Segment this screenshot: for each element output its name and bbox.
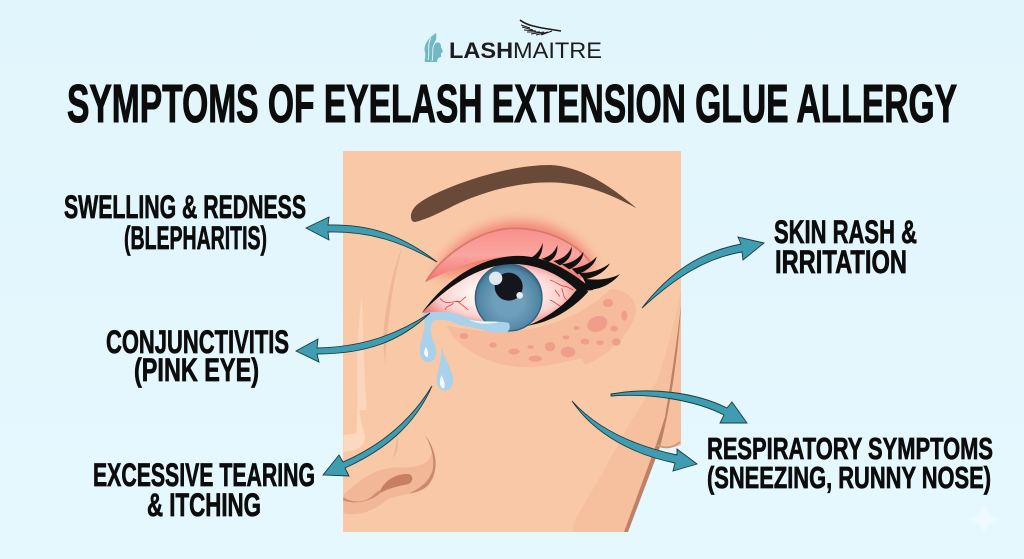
label: skin rash: IRRITATION <box>775 244 907 280</box>
arrow: respiratory upper <box>611 391 747 423</box>
eyelashes <box>532 243 620 290</box>
icon: teal face silhouette with hair <box>425 33 443 62</box>
pale highlight <box>357 297 367 410</box>
icon: faint sparkle <box>968 502 1000 536</box>
eyebrow <box>411 165 637 222</box>
pupil <box>495 273 523 301</box>
arrow: respiratory lower <box>572 401 697 471</box>
nostril wing curve <box>409 435 436 493</box>
face skin <box>343 151 681 532</box>
nose bridge highlight <box>343 380 365 452</box>
nose <box>343 380 436 514</box>
icon: lash <box>520 20 561 35</box>
tear highlights <box>424 347 428 357</box>
jaw shadow <box>573 290 681 532</box>
label: excessive tearing <box>93 457 315 523</box>
label: excessive tearing: EXCESSIVE TEARING <box>93 457 315 493</box>
lid redness glow <box>435 222 595 283</box>
label: swelling and redness <box>64 189 306 256</box>
side crease <box>393 437 398 458</box>
lid crease <box>426 228 590 282</box>
label: conjunctivitis: (PINK EYE) <box>134 352 259 388</box>
rash spots <box>460 299 627 362</box>
wrinkle <box>383 247 402 367</box>
eye highlights <box>489 272 502 285</box>
iris <box>475 264 542 331</box>
label: conjunctivitis: CONJUNCTIVITIS <box>106 324 289 360</box>
label: conjunctivitis <box>106 324 289 388</box>
label: excessive tearing: & ITCHING <box>147 487 261 523</box>
jaw line <box>624 305 681 532</box>
arrow: excessive tearing <box>323 386 432 476</box>
arrow: skin rash <box>642 237 764 308</box>
logo wordmark: LASHMAITRE <box>449 38 602 63</box>
label: skin rash <box>774 214 917 280</box>
tears <box>420 312 510 391</box>
under-eye rash patch <box>447 289 636 367</box>
swollen lid <box>426 228 590 282</box>
ear lobe line <box>657 442 680 447</box>
label: swelling and redness: (BLEPHARITIS) <box>124 220 267 256</box>
eye white <box>423 262 578 325</box>
arrow: swelling and redness <box>306 217 437 262</box>
lower lid liner <box>527 287 588 326</box>
nose shadow <box>343 453 435 514</box>
logo: Lashmaitre <box>425 20 602 63</box>
label: respiratory symptoms <box>707 431 993 495</box>
label: swelling and redness: SWELLING & REDNESS <box>64 189 306 225</box>
arrow: conjunctivitis <box>296 313 430 362</box>
upper lid liner <box>422 256 593 313</box>
blood veins <box>440 280 573 310</box>
eye region <box>357 165 637 410</box>
panel: face illustration <box>343 151 681 532</box>
nose outline <box>343 490 380 502</box>
nostril <box>379 474 412 493</box>
label: skin rash: SKIN RASH & <box>774 214 917 250</box>
